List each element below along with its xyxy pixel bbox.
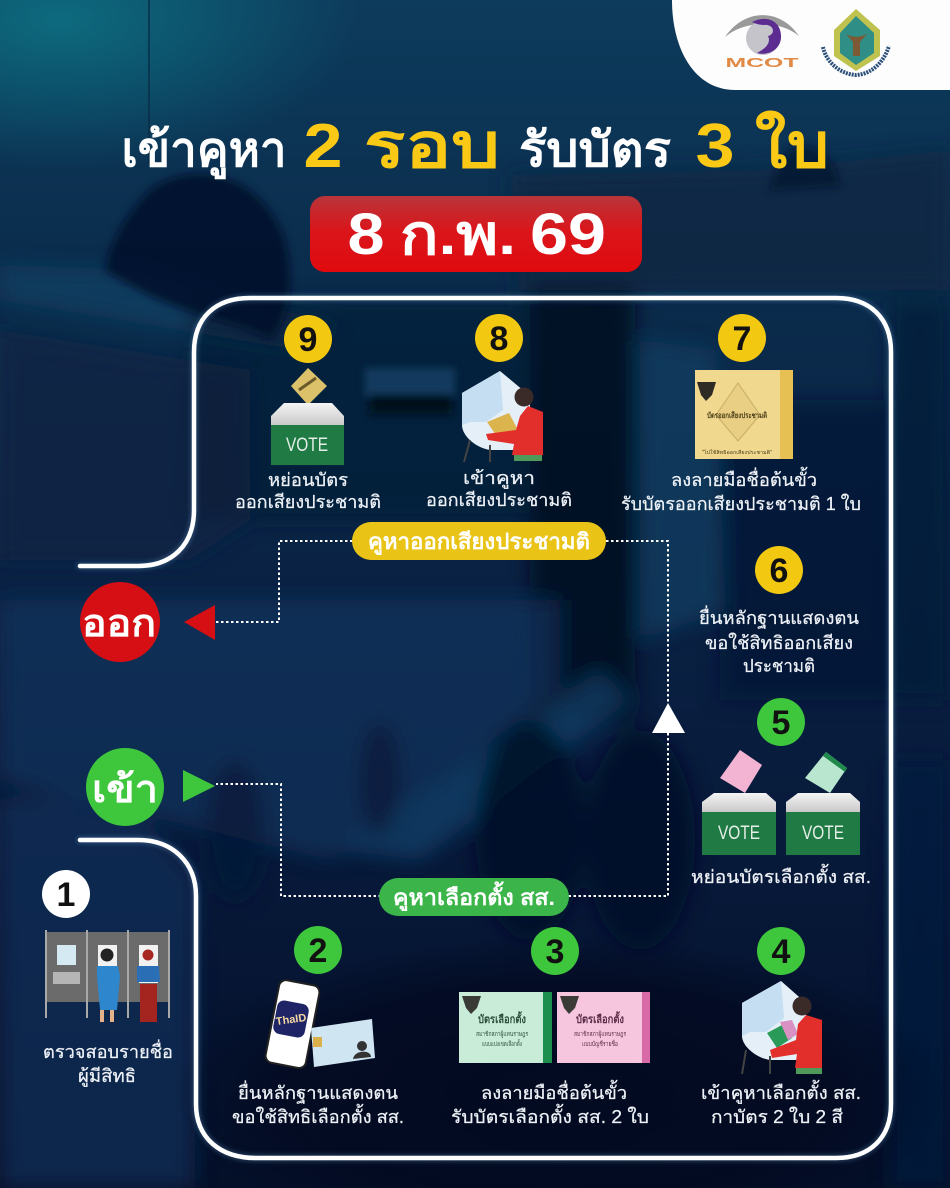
icon: MCOT logo xyxy=(725,15,799,70)
icon: pink ballot xyxy=(557,992,650,1063)
step 3: รับบัตรเลือกตั้ง สส. 2 ใบ xyxy=(451,1104,649,1127)
step 7 xyxy=(621,314,861,514)
icon: yellow referendum ballot xyxy=(695,370,793,459)
entry marker xyxy=(86,748,215,826)
exit marker xyxy=(80,582,215,662)
pill: MP election booth: คูหาเลือกตั้ง สส. xyxy=(393,881,555,912)
title: ใบ xyxy=(755,110,829,181)
flow frame line xyxy=(80,298,891,1158)
title: รอบ xyxy=(364,112,500,181)
step 6: ขอใช้สิทธิออกเสียง xyxy=(705,632,853,653)
step 9: หย่อนบัตร xyxy=(268,470,348,490)
icon: pink ballot: แบบบัญชีรายชื่อ xyxy=(582,1039,618,1048)
icon: green ballot: สมาชิกสภาผู้แทนราษฎร xyxy=(476,1030,528,1038)
step 5 xyxy=(691,698,871,887)
step 2: 2 xyxy=(309,932,327,970)
icon: person marking ballot in booth xyxy=(462,371,543,462)
step 7: ลงลายมือชื่อต้นขั้ว xyxy=(671,467,817,490)
date badge: 8 xyxy=(348,202,384,267)
date badge: ก.พ. xyxy=(400,203,516,266)
step 1: 1 xyxy=(57,876,75,914)
step 9: ออกเสียงประชามติ xyxy=(235,492,381,512)
date badge: 69 xyxy=(530,202,606,267)
logo panel xyxy=(672,0,950,90)
icon: two ballot boxes: VOTE xyxy=(718,823,760,844)
step 7: 7 xyxy=(733,320,751,358)
step 9: 9 xyxy=(299,321,317,359)
icon: ThaiID phone and ID card xyxy=(264,979,375,1069)
title: เข้าคูหา xyxy=(122,124,286,180)
step 4: กาบัตร 2 ใบ 2 สี xyxy=(711,1106,843,1127)
icon: voters at booths xyxy=(46,930,170,1022)
title: 3 xyxy=(696,112,734,181)
exit marker: ออก xyxy=(82,603,156,645)
step 4: 4 xyxy=(772,933,791,971)
step 8: เข้าคูหา xyxy=(463,468,535,489)
step 7: รับบัตรออกเสียงประชามติ 1 ใบ xyxy=(621,493,861,514)
icon: ballot box with yellow ballot: VOTE xyxy=(286,435,328,456)
icon: person marking two ballots in booth xyxy=(742,981,822,1074)
pill: MP election booth xyxy=(379,878,569,916)
title: รับบัตร xyxy=(519,124,671,177)
step 5: หย่อนบัตรเลือกตั้ง สส. xyxy=(691,864,871,887)
step 4 xyxy=(701,927,861,1127)
step 6 xyxy=(699,546,859,676)
icon: yellow referendum ballot: "ไปใช้สิทธิออกเสียงประชามติ" xyxy=(702,449,772,456)
step 1: ตรวจสอบรายชื่อ xyxy=(43,1039,173,1062)
step 9 xyxy=(235,315,381,512)
icon: green ballot: บัตรเลือกตั้ง xyxy=(478,1011,526,1026)
dotted route: voting booth path xyxy=(216,541,668,896)
step 8: 8 xyxy=(490,320,508,358)
title: 2 xyxy=(304,112,342,181)
arrow: upward flow xyxy=(652,703,685,733)
step 3: ลงลายมือชื่อต้นขั้ว xyxy=(481,1080,627,1103)
step 2 xyxy=(232,926,404,1127)
step 6: ยื่นหลักฐานแสดงตน xyxy=(699,605,859,629)
step 3 xyxy=(451,927,650,1127)
icon: two ballot boxes xyxy=(702,750,860,855)
step 6: 6 xyxy=(770,552,788,590)
icon: ThaiID phone and ID card: ThaID xyxy=(275,1012,307,1028)
icon: two ballot boxes: VOTE xyxy=(802,823,844,844)
step 1: ผู้มีสิทธิ xyxy=(78,1066,136,1087)
step 2: ยื่นหลักฐานแสดงตน xyxy=(238,1080,398,1104)
icon: provincial seal xyxy=(823,9,889,75)
icon: ballot box with yellow ballot xyxy=(271,368,344,465)
step 5: 5 xyxy=(772,704,790,742)
step 6: ประชามติ xyxy=(743,656,815,676)
title xyxy=(122,110,829,181)
step 8: ออกเสียงประชามติ xyxy=(426,490,572,510)
step 8 xyxy=(426,314,572,510)
date badge xyxy=(310,196,642,272)
step 4: เข้าคูหาเลือกตั้ง สส. xyxy=(701,1080,861,1104)
icon: MCOT logo: MCOT xyxy=(726,55,799,70)
entry marker: เข้า xyxy=(92,769,158,811)
pill: referendum booth xyxy=(352,522,606,560)
icon: green ballot: แบบแบ่งเขตเลือกตั้ง xyxy=(482,1039,522,1048)
icon: yellow referendum ballot: บัตรออกเสียงประชามติ xyxy=(707,410,767,420)
icon: green ballot xyxy=(459,992,552,1063)
icon: pink ballot: สมาชิกสภาผู้แทนราษฎร xyxy=(574,1030,626,1038)
step 2: ขอใช้สิทธิเลือกตั้ง สส. xyxy=(232,1104,404,1127)
step 1 xyxy=(42,870,173,1087)
pill: referendum booth: คูหาออกเสียงประชามติ xyxy=(368,529,590,556)
step 3: 3 xyxy=(546,933,564,971)
icon: pink ballot: บัตรเลือกตั้ง xyxy=(576,1011,624,1026)
